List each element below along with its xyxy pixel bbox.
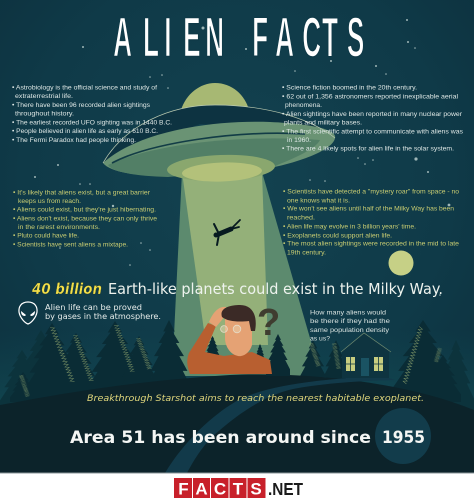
person with question mark — [187, 302, 290, 376]
headline: 40 billion planets: Earth-like planets could exist in the Milky Way. — [108, 280, 443, 298]
right yellow facts list: reached. — [287, 214, 315, 222]
illustration: flying saucer — [103, 83, 335, 183]
right yellow facts list: • Alien life may evolve in 3 billion years' time. — [283, 224, 416, 230]
title: ALIEN FACTS — [113, 6, 364, 69]
right facts list: in 1960. — [287, 137, 311, 144]
left yellow facts list: • Aliens don't exist, because they can only thrive — [13, 216, 157, 222]
right yellow facts list — [283, 188, 459, 256]
alien life callout: by gases in the atmosphere. — [45, 312, 161, 321]
right facts list: • 62 out of 1,356 astronomers reported inexplicable aerial — [282, 94, 458, 100]
house with lit windows — [341, 333, 391, 378]
left facts list: • The earliest recorded UFO sighting was in 1440 B.C. — [12, 120, 172, 126]
glasses — [221, 325, 241, 333]
facts logo: T — [233, 480, 244, 498]
vines on trees — [19, 324, 442, 397]
population density question — [310, 310, 390, 342]
footer — [0, 472, 474, 502]
facts logo — [174, 478, 303, 499]
population density question: How many aliens would — [310, 310, 386, 316]
headline: 40 billion planets: 40 billion — [31, 280, 102, 298]
facts logo: .NET — [268, 479, 303, 499]
right facts list — [282, 84, 463, 152]
right facts list: • Science fiction boomed in the 20th century. — [282, 84, 417, 92]
silhouette falling figure — [214, 220, 240, 245]
breakthrough starshot line: Breakthrough Starshot aims to reach the nearest habitable exoplanet. — [87, 394, 424, 404]
hair — [221, 305, 256, 331]
left facts list — [12, 84, 172, 144]
forest and ground — [0, 320, 474, 473]
facts logo: A — [195, 480, 208, 498]
circle behind year — [375, 408, 431, 464]
moon — [388, 250, 414, 276]
horizon glow — [0, 330, 474, 410]
facts logo: C — [214, 480, 226, 498]
right facts list: phenomena. — [285, 102, 322, 109]
left yellow facts list: in the rarest environments. — [18, 224, 100, 231]
facts logo: F — [178, 480, 189, 498]
right facts list: • There are 4 likely spots for alien life in the solar system. — [282, 146, 454, 152]
area 51 statement: Area 51 has been around since — [70, 428, 371, 447]
right yellow facts list: • Scientists have detected a "mystery roar" from space - no — [283, 188, 459, 196]
alien life callout: Alien life can be proved — [45, 303, 142, 312]
question mark: ? — [257, 302, 280, 344]
right facts list: plants and military bases. — [284, 120, 362, 126]
left facts list: extraterrestrial life. — [15, 93, 73, 100]
small trees in front of beam — [205, 334, 290, 376]
left yellow facts list: • Scientists have sent aliens a mixtape. — [13, 242, 128, 248]
facts logo: S — [250, 480, 262, 498]
right yellow facts list: • Exoplanets could support alien life. — [283, 232, 392, 240]
right facts list: • The first scientific attempt to communicate with aliens was — [282, 128, 463, 136]
torso and arm — [187, 323, 272, 374]
population density question: same population density — [310, 327, 390, 334]
left facts list: • People believed in alien life as early as 610 B.C. — [12, 128, 158, 135]
stars — [34, 19, 450, 296]
left facts list: • There have been 96 recorded alien sightings — [12, 102, 150, 109]
right yellow facts list: • The most alien sightings were recorded in the mid to late — [283, 240, 459, 248]
left yellow facts list: • Aliens could exist, but they're just hibernating. — [13, 206, 156, 214]
left yellow facts list: • Pluto could have life. — [13, 232, 79, 240]
area 51 statement: 1955 — [382, 428, 425, 447]
left yellow facts list — [13, 190, 157, 248]
alien life callout — [45, 303, 161, 321]
right yellow facts list: one knows what it is. — [287, 198, 350, 204]
face — [225, 316, 252, 356]
road — [165, 376, 395, 473]
right facts list: • Alien sightings have been reported in many nuclear power — [282, 111, 463, 118]
hand — [209, 307, 226, 327]
left yellow facts list: • It's likely that aliens exist, but a great barrier — [13, 190, 151, 196]
right yellow facts list: • We won't see aliens until half of the Milky Way has been — [283, 206, 454, 212]
left facts list: • The Fermi Paradox had people thinking. — [12, 137, 136, 144]
right yellow facts list: 19th century. — [287, 250, 326, 256]
left yellow facts list: keeps us from reach. — [18, 198, 81, 205]
alien icon — [19, 302, 37, 324]
left facts list: • Astrobiology is the official science and study of — [12, 84, 157, 92]
left facts list: throughout history. — [15, 110, 74, 118]
population density question: as us? — [310, 336, 330, 342]
population density question: be there if they had the — [310, 318, 390, 325]
illustration: light beam — [172, 172, 312, 376]
